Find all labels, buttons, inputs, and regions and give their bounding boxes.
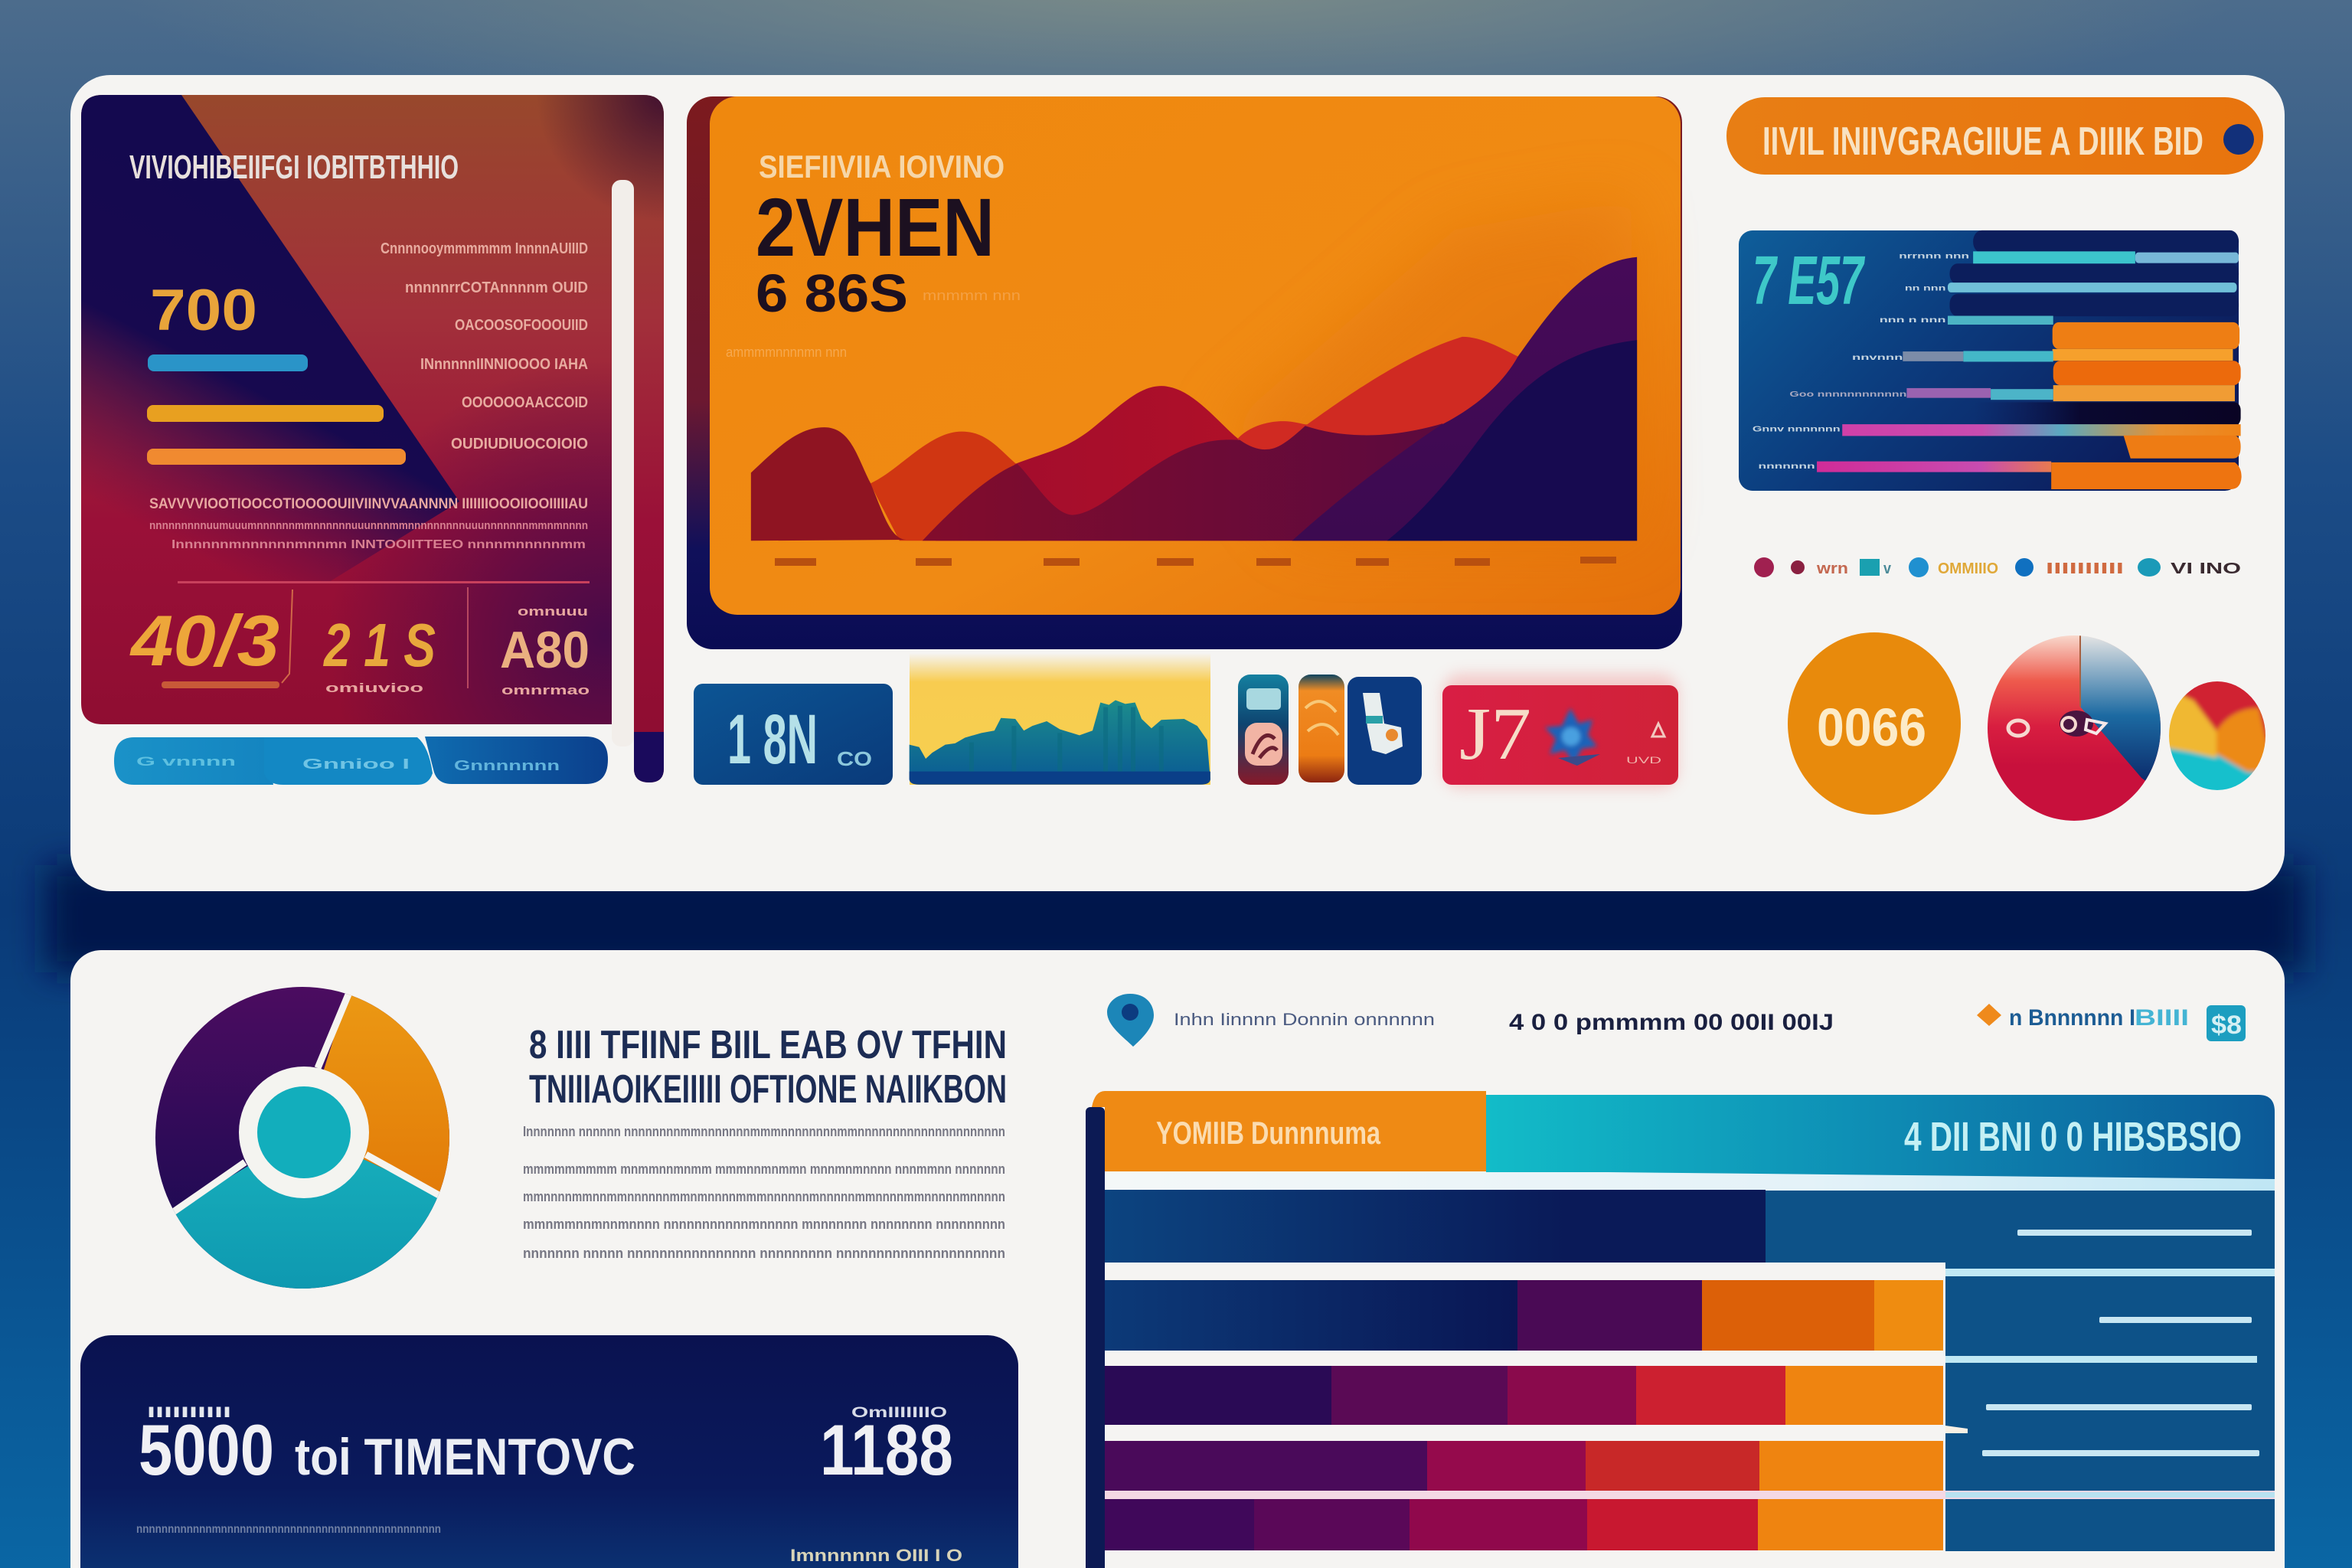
- card body: [81, 95, 664, 782]
- paragraph: [149, 496, 588, 551]
- darker orange band behind chart: [1225, 199, 1637, 536]
- teal header: [1486, 1095, 2275, 1179]
- navy triangle: [81, 95, 459, 582]
- pie chart: [1988, 635, 2161, 821]
- tab 3: Gnnnnnnn: [454, 758, 560, 773]
- panel: bottom dashboard: [70, 950, 2285, 1568]
- right aligned labels: OUDIUDIUOCOIOIO: [451, 436, 588, 452]
- legend: IIIIIIIIII: [2046, 560, 2124, 577]
- right aligned labels: OOOOOOAACCOID: [462, 394, 588, 411]
- paragraph: nnnnnnnnnuumuuumnnnnnnmmnnnnnnuuunnnmmnnnnnnnnnuuunnnnnnnmmnmnnnn: [149, 519, 588, 532]
- blue burst: [1545, 708, 1597, 764]
- tile: blue stat: CO: [837, 747, 872, 770]
- bar rows: Gnnv nnnnnnn: [1753, 426, 1841, 434]
- heading: [529, 1023, 1007, 1112]
- legend: v: [1883, 560, 1892, 577]
- icon tile 2: [1298, 675, 1344, 782]
- gold bar: [147, 405, 384, 422]
- tile: red stat: J7: [1459, 693, 1531, 776]
- tab 3: [425, 737, 608, 784]
- body text: Innnnnnn nnnnnn nnnnnnnnmmnnnnnnnmmmnnnnnnnnmmnnnnnnnnnnnnnnnnnnnnn: [523, 1124, 1005, 1139]
- summary footnote: nnnnnnnnnnnnmnnnnnnnnnnnnnnnnnnnnnnnnnnnnnnnnnnn: [136, 1523, 441, 1536]
- header pill: [1726, 97, 2263, 175]
- card backing: [687, 96, 1682, 649]
- right column dividers: [1945, 1269, 2275, 1433]
- row 4: [1105, 1441, 1943, 1491]
- faint caption 1: ammmmnnnnmn nnn: [726, 345, 847, 360]
- paragraph: SAVVVVIOOTIOOCOTIOOOOUIIVIINVVAANNNN IIIIIIIOOOIIOOIIIIIAU: [149, 496, 588, 512]
- right column lower: [1945, 1263, 2275, 1551]
- donut chart: [145, 980, 459, 1294]
- body text: [523, 1124, 1005, 1261]
- tile: blue stat: 1 8N: [727, 701, 818, 779]
- axis ticks: [775, 557, 1616, 566]
- divider line: [178, 581, 590, 583]
- donut hub: [257, 1086, 351, 1178]
- heading: TNIIIAOIKEIIIII OFTIONE NAIIKBON: [529, 1067, 1007, 1112]
- pie hub: [2060, 710, 2093, 737]
- summary number right: 1188: [820, 1410, 953, 1490]
- small multicolour ball: [2169, 681, 2265, 790]
- legend: VI INO: [2171, 560, 2241, 577]
- panel: top dashboard: [70, 75, 2285, 891]
- tile: red stat: [1442, 674, 1678, 789]
- bar rows: nnvnnn: [1852, 354, 1903, 362]
- icon: orange marker: [1977, 1004, 2001, 1026]
- table: [1086, 1091, 2275, 1568]
- bar rows: Goo nnnnnnnnnnnn: [1789, 390, 1906, 399]
- card title: VIVIOHIBEIIFGI IOBITBTHHIO: [129, 149, 459, 186]
- tile: yellow skyline: [910, 653, 1210, 785]
- orange bar: [147, 449, 406, 465]
- table left rail: [1086, 1107, 1105, 1568]
- header text 1: Inhn Iinnnn Donnin onnnnnn: [1174, 1010, 1435, 1029]
- tab 2: [264, 737, 433, 785]
- header pill: IIVIL INIIVGRAGIIUE A DIIIK BID: [1762, 119, 2203, 164]
- orange face: [710, 96, 1681, 615]
- legend: [1754, 557, 2241, 577]
- card shading: [81, 95, 664, 782]
- legend: OMMIIIO: [1938, 560, 1998, 577]
- bar rows: nnnnnnn: [1759, 462, 1815, 471]
- heading: 8 IIII TFIINF BIIL EAB OV TFHIN: [529, 1023, 1007, 1067]
- paragraph: Innnnnnmnnnnnnmnnmn INNTOOIITTEEO nnnnmnnnnnmm: [172, 538, 586, 551]
- stat captions: [325, 604, 590, 697]
- stat 40/3: 40/3: [129, 600, 279, 681]
- row 3: [1105, 1366, 1943, 1425]
- right aligned labels: nnnnnrrCOTAnnnnm OUID: [405, 279, 588, 296]
- tile: blue stat: [694, 684, 893, 785]
- vertical divider 2: [467, 587, 469, 688]
- bar rows: nn nnn: [1905, 284, 1945, 292]
- body text: nnnnnnn nnnnn nnnnnnnnnnnnnnnn nnnnnnnnn nnnnnnnnnnnnnnnnnnnnn: [523, 1246, 1005, 1261]
- blue bar: [148, 354, 308, 371]
- icon: teal badge: $8: [2211, 1011, 2242, 1040]
- header text 3: n Bnnnnnn I: [2009, 1005, 2135, 1031]
- row 1: [1105, 1190, 1766, 1263]
- tile: red stat: UVD: [1626, 755, 1662, 766]
- orange badge: [1788, 632, 1961, 815]
- legend: wrn: [1816, 560, 1848, 577]
- donut hub ring: [239, 1067, 369, 1198]
- summary small label right: OmIIIIIIIO: [851, 1405, 947, 1421]
- card heading: SIEFIIVIIA IOIVINO: [759, 149, 1004, 185]
- icon: teal badge: [2207, 1005, 2246, 1041]
- header text 2: 4 0 0 pmmmm 00 00II 00IJ: [1509, 1010, 1834, 1035]
- icon tile 1: [1238, 675, 1289, 785]
- tab 2: Gnnioo I: [302, 756, 410, 772]
- side bar white: [612, 180, 634, 746]
- header text 3: BIIII: [2135, 1005, 2189, 1031]
- right column: [1766, 1190, 2275, 1263]
- row 2: [1105, 1280, 1943, 1351]
- panel: left metrics card: [81, 95, 664, 785]
- icon tile 3: [1348, 677, 1422, 785]
- summary small label left: IIIIIIIIII: [147, 1405, 231, 1421]
- body text: mmmmmmmmm mnmmnnmnmm mmmnnmnmmn mnnmnmnnnn nnnmmnn nnnnnnn: [523, 1161, 1005, 1177]
- bar rows: [1753, 230, 2242, 489]
- body text: mmnmmnnmnnmnnnn nnnnnnnnnnnmnnnnn mnnnnnnn nnnnnnnn nnnnnnnnn: [523, 1217, 1005, 1232]
- stat captions: omnrmao: [501, 683, 590, 697]
- stat 21S: 2 1 S: [322, 611, 436, 679]
- stat captions: omiuvioo: [325, 681, 423, 695]
- faint caption 2: mnmmm nnn: [923, 288, 1021, 303]
- sub-headline: 6 86S: [756, 263, 908, 323]
- stat underline: [162, 681, 279, 688]
- panel: navy summary: [80, 1335, 1018, 1568]
- row 5: [1105, 1499, 1943, 1550]
- stat A80: A80: [500, 621, 590, 679]
- tile: app icons: [1238, 675, 1422, 785]
- right aligned labels: [381, 240, 588, 452]
- right aligned labels: INnnnnnIINNIOOOO IAHA: [420, 356, 588, 373]
- tab 1: G vnnnn: [136, 754, 236, 769]
- panel: centre area chart card: [687, 96, 1682, 649]
- card lower shading: [322, 352, 620, 724]
- header separator: [1105, 1172, 2275, 1191]
- headline: 2VHEN: [756, 181, 995, 273]
- stat captions: omnuuu: [518, 604, 588, 619]
- summary right footnote: Imnnnnnn OIII I O: [790, 1546, 962, 1565]
- orange header: YOMIIB Dunnnuma: [1156, 1115, 1380, 1151]
- big number 700: 700: [150, 278, 257, 343]
- right aligned labels: Cnnnnooymmmmmm InnnnAUIIID: [381, 240, 588, 257]
- body text: mmnnnnmmnnmmnnnnnnmmnmnnnnmmmnnnnnnmnnnnnmmnnnnmmnnnnnmnnnnn: [523, 1189, 1005, 1204]
- pale row divider: [1105, 1491, 2275, 1499]
- icon: location pin: [1107, 994, 1154, 1047]
- right column value bars: [1982, 1230, 2259, 1456]
- panel: horizontal bars: [1739, 230, 2242, 491]
- pale row divider right: [1945, 1492, 2275, 1498]
- orange header: [1092, 1091, 1486, 1171]
- vertical divider 1: [282, 590, 292, 683]
- area chart: [751, 257, 1637, 541]
- right aligned labels: OACOOSOFOOOUIID: [455, 317, 588, 334]
- bar rows: nrrnnn nnn: [1899, 252, 1969, 260]
- pill icon: [2223, 124, 2254, 155]
- teal header: 4 DII BNI 0 0 HIBSBSIO: [1904, 1114, 2242, 1160]
- bar rows: nnn n nnn: [1880, 316, 1945, 325]
- orange badge: 0066: [1817, 697, 1926, 757]
- tab 1: [114, 737, 273, 785]
- big number: 7 E57: [1753, 243, 1865, 319]
- summary label: toi TIMENTOVC: [295, 1428, 635, 1486]
- side bar base: [634, 732, 664, 782]
- summary number: 5000: [139, 1410, 274, 1490]
